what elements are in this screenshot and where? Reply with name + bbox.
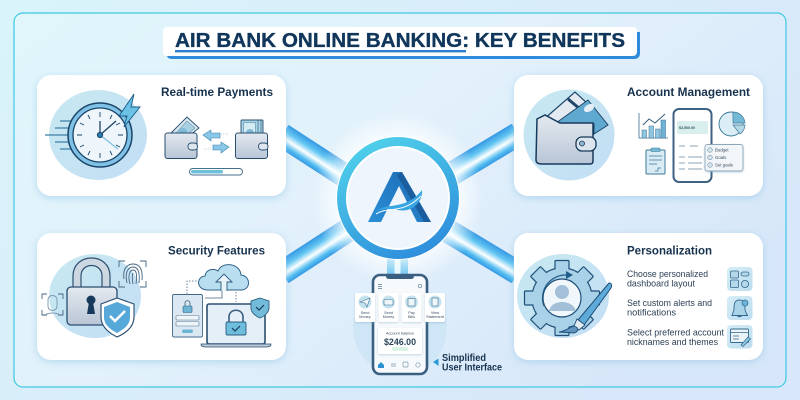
menu card: Goals xyxy=(715,155,726,160)
card: View Statement: Statement xyxy=(426,315,445,319)
icon: face scan xyxy=(42,294,63,316)
icon: A logo xyxy=(368,172,431,222)
icon: padlock with shield xyxy=(49,254,141,338)
icon: stopwatch with bolt xyxy=(45,90,147,180)
icon: fingerprint xyxy=(119,261,146,287)
card: Send Money 2 xyxy=(378,293,398,322)
text: alerts: Set custom alerts and xyxy=(627,298,712,308)
account balance card: $246.00 xyxy=(384,337,416,348)
bar chart xyxy=(639,113,668,138)
connector: top-left xyxy=(275,125,360,191)
icon: transfer arrows xyxy=(203,130,229,153)
icon: phone dashboard xyxy=(674,109,712,182)
card: Send Money xyxy=(355,293,375,322)
icon: laptop with lock xyxy=(201,298,271,347)
icon: clipboard xyxy=(646,148,665,174)
title xyxy=(163,27,640,59)
menu card: Budget xyxy=(715,148,729,152)
card: Send Money: Send xyxy=(361,311,369,315)
icon: cloud upload xyxy=(187,265,248,302)
icon: login panel xyxy=(172,294,202,337)
icon: wallet left xyxy=(165,117,199,158)
hub: central logo xyxy=(312,112,484,284)
text: dashboard layout: Choose personalized xyxy=(627,269,708,279)
card: View Statement: View xyxy=(431,311,439,315)
icon: gear with brush xyxy=(517,254,612,338)
heading: Security Features: Security Features xyxy=(168,246,265,258)
panel: Account Management xyxy=(514,75,763,196)
chart: pie xyxy=(719,112,745,136)
heading: Personalization: Personalization xyxy=(627,246,712,258)
panel: Security Features xyxy=(37,233,286,360)
card: Send Money 2: Send xyxy=(384,311,393,315)
label: Simplified User Interface xyxy=(433,353,502,374)
icon: wallet right xyxy=(236,120,268,158)
icon: phone dashboard: $3,500.00 xyxy=(679,126,695,130)
connector: bottom phone xyxy=(387,250,408,276)
title: AIR BANK ONLINE BANKING: KEY BENEFITS xyxy=(175,30,625,52)
card: Send Money: Money xyxy=(359,315,371,319)
icon: theme tile xyxy=(727,325,752,348)
menu card: Set goals xyxy=(715,162,733,168)
heading: Account Management: Account Management xyxy=(627,87,750,99)
icon: layout tile xyxy=(727,267,752,291)
heading: Real-time Payments: Real-time Payments xyxy=(161,87,273,99)
menu card xyxy=(705,144,743,171)
icon: wallet with cards xyxy=(524,90,614,180)
phone: simplified user interface xyxy=(353,274,447,375)
text: nicknames: Select preferred account xyxy=(627,328,724,338)
panel: Personalization: dashboard layout xyxy=(627,278,695,288)
account balance card xyxy=(378,328,422,354)
connector: bottom-left xyxy=(275,217,360,283)
nav bar icons xyxy=(378,362,420,368)
panel: Personalization: nicknames and themes xyxy=(627,337,718,347)
card: Send Money 2: Money xyxy=(383,315,394,319)
panel: Real-time Payments xyxy=(37,75,286,196)
account balance card: Account balance xyxy=(386,332,414,336)
icon: bell tile xyxy=(727,296,752,320)
panel: Personalization: notifications xyxy=(627,308,676,318)
label: Simplified User Interface: Simplified xyxy=(442,353,486,364)
label: Simplified User Interface: User Interface xyxy=(442,362,502,374)
card: Pay Bills: Pay xyxy=(408,311,415,315)
connector: bottom-right xyxy=(439,219,524,283)
card: Pay Bills xyxy=(402,293,422,322)
progress bar xyxy=(190,168,242,175)
panel: Personalization xyxy=(514,233,763,360)
connector: top-right xyxy=(439,124,524,188)
card: Pay Bills: Bills xyxy=(408,315,415,319)
card: View Statement xyxy=(425,293,445,322)
